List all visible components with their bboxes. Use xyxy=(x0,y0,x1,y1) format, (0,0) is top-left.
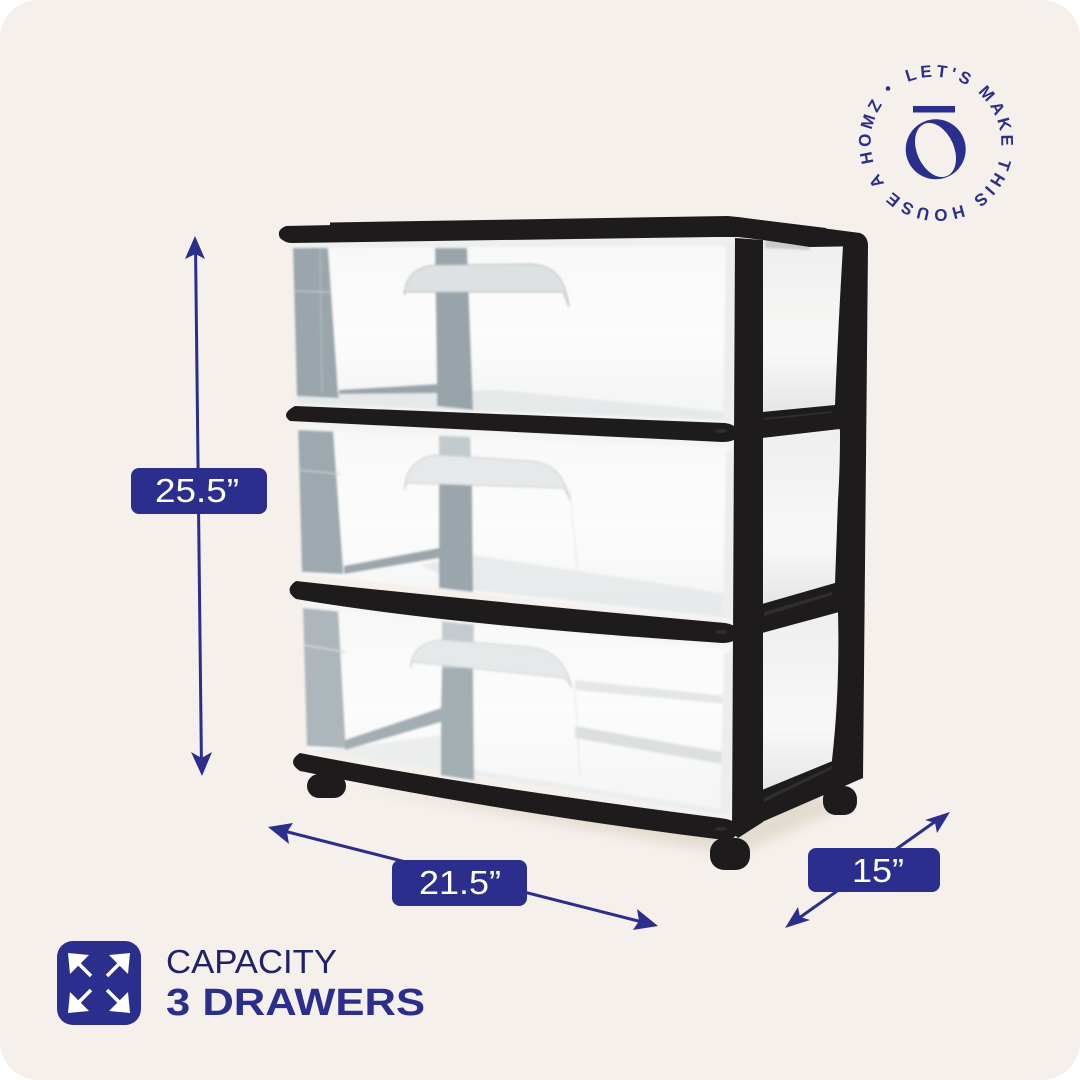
label: 21.5: 21.5” xyxy=(419,864,501,901)
capacity section xyxy=(57,941,425,1025)
label: 25.5: 25.5” xyxy=(155,472,239,509)
logo mark xyxy=(906,106,966,184)
label: 15 xyxy=(808,848,940,892)
circular slogan: LET'S MAKE THIS HOUSE A HOMZ xyxy=(858,64,1014,221)
bullet xyxy=(886,86,890,91)
top drawer xyxy=(293,238,737,423)
height dimension xyxy=(131,236,267,776)
label: 21.5 xyxy=(392,860,527,906)
side panels xyxy=(763,240,843,790)
arrow: width xyxy=(268,823,658,930)
arrow: depth xyxy=(785,812,950,928)
black frame xyxy=(279,216,868,870)
floor shadow xyxy=(345,785,850,855)
casters xyxy=(307,774,346,798)
middle drawer xyxy=(297,424,737,622)
label: 25.5 xyxy=(131,468,267,514)
capacity text xyxy=(166,944,425,1024)
capacity text: 3 DRAWERS xyxy=(166,982,425,1024)
rail highlights xyxy=(715,411,832,831)
side rails xyxy=(762,405,857,438)
back top bar xyxy=(330,216,826,233)
width dimension xyxy=(268,823,658,930)
capacity text: CAPACITY xyxy=(166,944,337,981)
logo badge xyxy=(858,64,1014,221)
front right post xyxy=(732,238,763,838)
icon: expand arrows xyxy=(57,941,141,1025)
arrow: height xyxy=(185,236,212,776)
bottom drawer xyxy=(303,602,736,818)
rear right post xyxy=(832,246,868,782)
depth dimension xyxy=(785,812,950,928)
label: 15: 15” xyxy=(852,852,904,889)
drawer unit xyxy=(279,216,868,870)
shelf rails xyxy=(286,406,738,442)
top rail xyxy=(279,217,868,247)
